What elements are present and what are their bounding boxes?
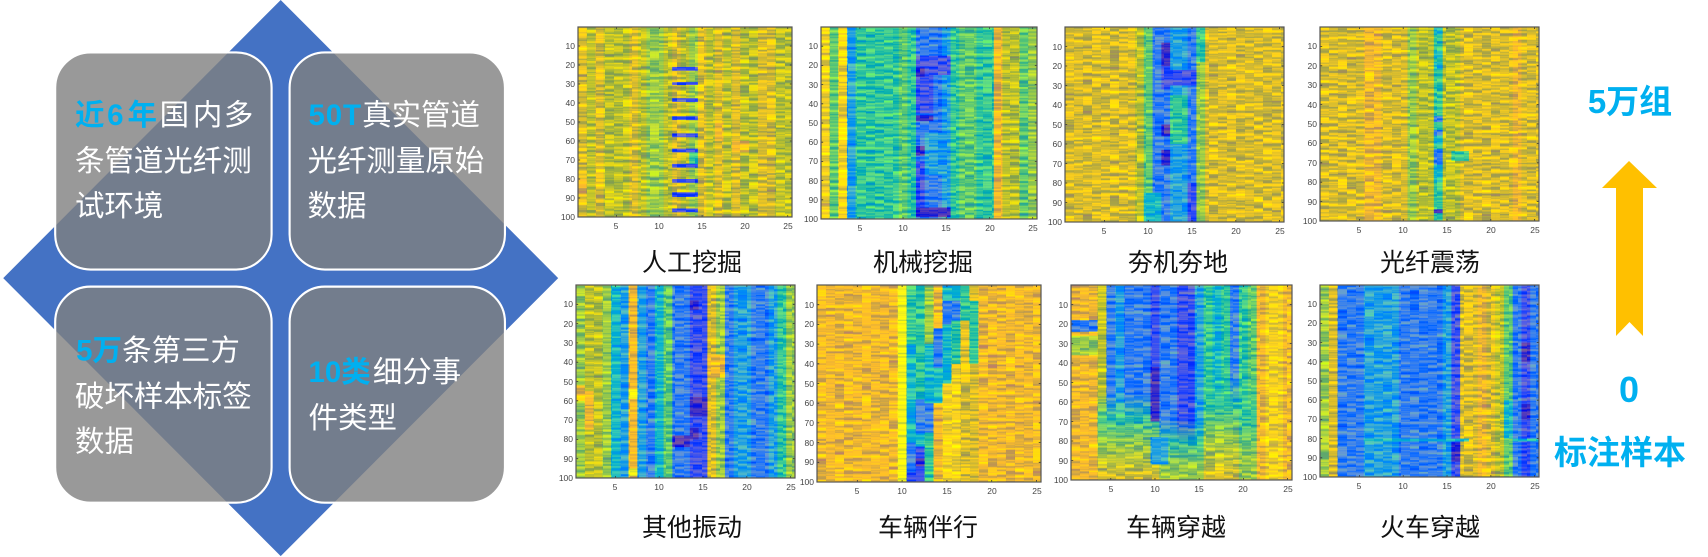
axis labels: 夯机夯地: 80 xyxy=(1053,178,1062,188)
axis labels: 车辆伴行: 30 xyxy=(805,339,814,349)
panel: 5万 label samples: 破坏样本标签 xyxy=(75,380,252,413)
axis labels: 光纤震荡: 10 xyxy=(1398,225,1408,235)
axis labels: 车辆穿越: 90 xyxy=(1059,456,1068,466)
caption: 火车穿越: 火车穿越 xyxy=(1380,514,1480,542)
panel: 10类 event types xyxy=(290,287,505,503)
axis labels: 车辆穿越: 30 xyxy=(1059,339,1068,349)
axis labels: 车辆伴行: 50 xyxy=(805,379,814,389)
axis labels: 机械挖掘: 20 xyxy=(809,60,818,70)
panel: 近6年 test environments: 近 xyxy=(75,99,104,132)
axis labels: 车辆伴行: 80 xyxy=(805,438,814,448)
axis labels: 人工挖掘: 20 xyxy=(740,221,750,231)
axis labels: 火车穿越: 100 xyxy=(1303,472,1317,482)
axis labels: 火车穿越: 15 xyxy=(1442,481,1452,491)
panel: 5万 label samples xyxy=(55,287,272,503)
axis labels: 光纤震荡: 30 xyxy=(1308,80,1317,90)
panel: 10类 event types: 10类 xyxy=(309,356,371,389)
axis labels: 光纤震荡 xyxy=(1303,41,1540,235)
chart: 车辆穿越 heatmap xyxy=(1071,285,1292,480)
axis labels: 其他振动: 50 xyxy=(564,377,573,387)
axis labels: 其他振动: 40 xyxy=(564,357,573,367)
axis labels: 火车穿越: 25 xyxy=(1530,481,1540,491)
axis labels: 光纤震荡: 70 xyxy=(1308,158,1317,168)
axis labels: 火车穿越: 70 xyxy=(1308,414,1317,424)
chart: 车辆伴行 heatmap xyxy=(817,285,1041,482)
axis labels: 火车穿越: 5 xyxy=(1357,481,1362,491)
panel: 10类 event types: 件类型 xyxy=(309,402,397,435)
axis labels: 火车穿越: 40 xyxy=(1308,357,1317,367)
axis labels: 人工挖掘: 60 xyxy=(566,136,575,146)
axis labels: 机械挖掘: 15 xyxy=(941,223,951,233)
axis labels: 人工挖掘: 10 xyxy=(654,221,664,231)
axis labels: 车辆穿越: 80 xyxy=(1059,436,1068,446)
axis labels: 火车穿越: 90 xyxy=(1308,453,1317,463)
panel: 50T raw data: 数据 xyxy=(307,190,366,223)
axis labels: 车辆穿越: 50 xyxy=(1059,378,1068,388)
axis labels: 夯机夯地: 50 xyxy=(1053,120,1062,130)
axis labels: 车辆伴行: 10 xyxy=(897,486,907,496)
axis labels: 夯机夯地: 10 xyxy=(1053,42,1062,52)
axis labels: 车辆伴行: 100 xyxy=(800,477,814,487)
caption: 车辆伴行: 车辆伴行 xyxy=(878,514,978,542)
axis labels: 光纤震荡: 20 xyxy=(1486,225,1496,235)
axis labels: 车辆伴行: 15 xyxy=(942,486,952,496)
axis labels: 光纤震荡: 80 xyxy=(1308,177,1317,187)
panel: 50T raw data xyxy=(290,52,505,270)
axis labels: 其他振动: 10 xyxy=(564,299,573,309)
left diagram: diamond with four cards xyxy=(3,0,558,556)
axis labels: 人工挖掘: 40 xyxy=(566,98,575,108)
axis labels: 车辆穿越: 20 xyxy=(1238,484,1248,494)
axis labels: 火车穿越: 30 xyxy=(1308,338,1317,348)
axis labels: 光纤震荡: 10 xyxy=(1308,41,1317,51)
axis labels: 人工挖掘: 50 xyxy=(566,117,575,127)
axis labels: 人工挖掘: 20 xyxy=(566,60,575,70)
axis labels: 车辆穿越 xyxy=(1054,300,1293,494)
axis labels: 车辆穿越: 15 xyxy=(1194,484,1204,494)
panel: 50T raw data: 真实管道 xyxy=(362,99,480,132)
axis labels: 其他振动: 60 xyxy=(564,396,573,406)
axis labels: 机械挖掘: 20 xyxy=(985,223,995,233)
axis labels: 机械挖掘: 60 xyxy=(809,137,818,147)
axis labels: 火车穿越: 20 xyxy=(1308,318,1317,328)
axis labels: 车辆穿越: 5 xyxy=(1109,484,1114,494)
axis labels: 机械挖掘: 50 xyxy=(809,118,818,128)
chart: 光纤震荡 heatmap xyxy=(1320,27,1539,221)
axis labels: 火车穿越 xyxy=(1303,299,1540,491)
axis labels: 其他振动: 5 xyxy=(613,482,618,492)
axis labels: 光纤震荡: 20 xyxy=(1308,61,1317,71)
panel: 近6年 test environments xyxy=(55,52,272,270)
axis labels: 夯机夯地: 20 xyxy=(1053,61,1062,71)
axis labels: 火车穿越: 10 xyxy=(1398,481,1408,491)
axis labels: 车辆穿越: 70 xyxy=(1059,417,1068,427)
axis labels: 其他振动: 10 xyxy=(654,482,664,492)
label: 0: 0 xyxy=(1619,369,1639,410)
axis labels: 其他振动 xyxy=(559,299,796,492)
caption: 其他振动: 其他振动 xyxy=(642,514,742,542)
axis labels: 机械挖掘: 100 xyxy=(804,214,818,224)
axis labels: 其他振动: 15 xyxy=(698,482,708,492)
axis labels: 夯机夯地: 5 xyxy=(1102,226,1107,236)
axis labels: 火车穿越: 50 xyxy=(1308,376,1317,386)
axis labels: 夯机夯地: 25 xyxy=(1275,226,1285,236)
axis labels: 机械挖掘: 25 xyxy=(1028,223,1038,233)
panel: 近6年 test environments: 6 xyxy=(107,99,124,132)
axis labels: 其他振动: 20 xyxy=(564,319,573,329)
axis labels: 机械挖掘: 10 xyxy=(898,223,908,233)
panel: 5万 label samples: 5万 xyxy=(76,334,122,367)
axis labels: 车辆伴行: 90 xyxy=(805,457,814,467)
panel: 近6年 test environments: 内 xyxy=(193,99,222,132)
panel: 近6年 test environments: 条管道光纤测 xyxy=(75,145,252,178)
axis labels: 车辆穿越: 25 xyxy=(1283,484,1293,494)
axis labels: 光纤震荡: 15 xyxy=(1442,225,1452,235)
panel: 50T raw data: 光纤测量原始 xyxy=(307,145,484,178)
axis labels: 车辆伴行: 10 xyxy=(805,300,814,310)
background diamond xyxy=(3,0,558,556)
axis labels: 机械挖掘: 30 xyxy=(809,80,818,90)
axis labels: 车辆伴行 xyxy=(800,300,1042,496)
axis labels: 光纤震荡: 100 xyxy=(1303,216,1317,226)
axis labels: 机械挖掘: 40 xyxy=(809,99,818,109)
axis labels: 火车穿越: 80 xyxy=(1308,434,1317,444)
chart: 人工挖掘 heatmap xyxy=(578,27,792,217)
axis labels: 车辆穿越: 40 xyxy=(1059,358,1068,368)
chart: 其他振动 heatmap xyxy=(576,285,795,478)
label: 5万组: 5万组 xyxy=(1588,83,1672,120)
axis labels: 车辆伴行: 20 xyxy=(805,319,814,329)
axis labels: 人工挖掘: 90 xyxy=(566,193,575,203)
axis labels: 车辆伴行: 20 xyxy=(987,486,997,496)
axis labels: 火车穿越: 20 xyxy=(1486,481,1496,491)
axis labels: 车辆穿越: 10 xyxy=(1059,300,1068,310)
arrow: upward growth xyxy=(1602,161,1657,336)
panel: 近6年 test environments: 多 xyxy=(224,99,253,132)
axis labels: 其他振动: 90 xyxy=(564,454,573,464)
axis labels: 人工挖掘: 5 xyxy=(614,221,619,231)
axis labels: 夯机夯地: 70 xyxy=(1053,159,1062,169)
axis labels: 夯机夯地 xyxy=(1048,42,1285,236)
axis labels: 火车穿越: 10 xyxy=(1308,299,1317,309)
axis labels: 光纤震荡: 25 xyxy=(1530,225,1540,235)
caption: 夯机夯地: 夯机夯地 xyxy=(1128,249,1228,277)
label: 标注样本: 标注样本 xyxy=(1554,434,1686,471)
axis labels: 人工挖掘: 100 xyxy=(561,212,575,222)
chart: 火车穿越 heatmap xyxy=(1320,285,1539,477)
axis labels: 车辆穿越: 60 xyxy=(1059,397,1068,407)
axis labels: 光纤震荡: 50 xyxy=(1308,119,1317,129)
panel: 50T raw data: 50T xyxy=(309,99,362,132)
panel: 5万 label samples: 数据 xyxy=(75,425,134,458)
caption: 光纤震荡: 光纤震荡 xyxy=(1380,249,1480,277)
panel: 5万 label samples: 条第三方 xyxy=(122,334,240,367)
axis labels: 人工挖掘 xyxy=(561,41,793,231)
panel: 近6年 test environments: 年 xyxy=(127,99,157,132)
axis labels: 其他振动: 70 xyxy=(564,415,573,425)
axis labels: 夯机夯地: 15 xyxy=(1187,226,1197,236)
axis labels: 光纤震荡: 90 xyxy=(1308,197,1317,207)
axis labels: 其他振动: 80 xyxy=(564,434,573,444)
axis labels: 其他振动: 20 xyxy=(742,482,752,492)
axis labels: 人工挖掘: 70 xyxy=(566,155,575,165)
axis labels: 其他振动: 30 xyxy=(564,338,573,348)
panel: 10类 event types: 细分事 xyxy=(373,356,461,389)
axis labels: 夯机夯地: 30 xyxy=(1053,81,1062,91)
axis labels: 夯机夯地: 10 xyxy=(1143,226,1153,236)
axis labels: 光纤震荡: 40 xyxy=(1308,100,1317,110)
axis labels: 人工挖掘: 30 xyxy=(566,79,575,89)
axis labels: 光纤震荡: 5 xyxy=(1357,225,1362,235)
axis labels: 车辆伴行: 25 xyxy=(1032,486,1042,496)
panel: 近6年 test environments: 国 xyxy=(160,99,189,132)
caption: 机械挖掘: 机械挖掘 xyxy=(873,249,973,277)
axis labels: 光纤震荡: 60 xyxy=(1308,138,1317,148)
axis labels: 机械挖掘: 70 xyxy=(809,156,818,166)
axis labels: 其他振动: 100 xyxy=(559,473,573,483)
axis labels: 车辆穿越: 100 xyxy=(1054,475,1068,485)
axis labels: 夯机夯地: 20 xyxy=(1231,226,1241,236)
chart: 机械挖掘 heatmap xyxy=(821,27,1037,219)
axis labels: 人工挖掘: 25 xyxy=(783,221,793,231)
panel: 近6年 test environments: 试环境 xyxy=(75,190,163,223)
axis labels: 夯机夯地: 40 xyxy=(1053,100,1062,110)
axis labels: 机械挖掘 xyxy=(804,41,1038,233)
axis labels: 火车穿越: 60 xyxy=(1308,395,1317,405)
axis labels: 夯机夯地: 100 xyxy=(1048,217,1062,227)
axis labels: 车辆穿越: 10 xyxy=(1150,484,1160,494)
axis labels: 人工挖掘: 10 xyxy=(566,41,575,51)
axis labels: 夯机夯地: 60 xyxy=(1053,139,1062,149)
caption: 人工挖掘: 人工挖掘 xyxy=(642,249,742,277)
axis labels: 其他振动: 25 xyxy=(786,482,796,492)
axis labels: 车辆伴行: 5 xyxy=(855,486,860,496)
axis labels: 机械挖掘: 90 xyxy=(809,195,818,205)
caption: 车辆穿越: 车辆穿越 xyxy=(1126,514,1226,542)
axis labels: 夯机夯地: 90 xyxy=(1053,198,1062,208)
chart: 夯机夯地 heatmap xyxy=(1065,27,1284,222)
axis labels: 机械挖掘: 5 xyxy=(858,223,863,233)
axis labels: 机械挖掘: 80 xyxy=(809,176,818,186)
axis labels: 机械挖掘: 10 xyxy=(809,41,818,51)
axis labels: 人工挖掘: 80 xyxy=(566,174,575,184)
axis labels: 车辆伴行: 60 xyxy=(805,398,814,408)
axis labels: 人工挖掘: 15 xyxy=(697,221,707,231)
axis labels: 车辆伴行: 70 xyxy=(805,418,814,428)
axis labels: 车辆伴行: 40 xyxy=(805,359,814,369)
axis labels: 车辆穿越: 20 xyxy=(1059,319,1068,329)
